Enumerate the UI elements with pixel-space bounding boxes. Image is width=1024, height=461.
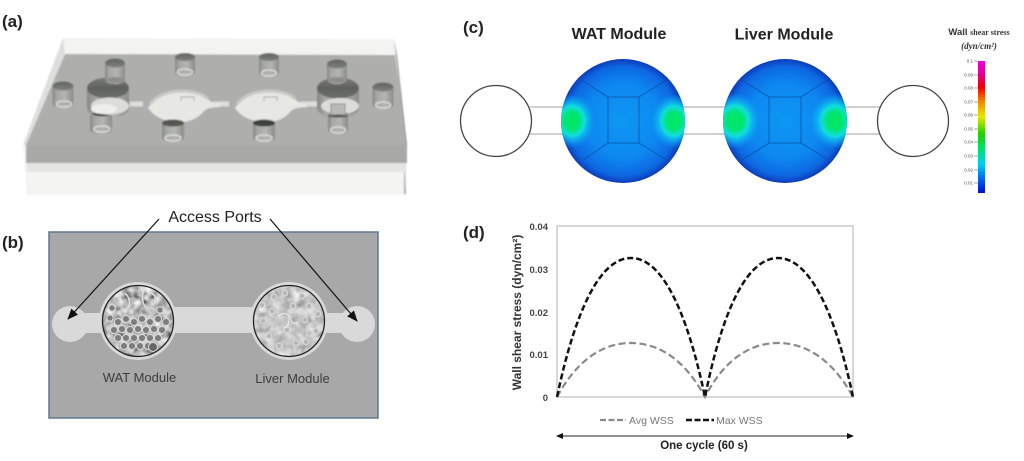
colour scale: wall shear stress: [948, 27, 1010, 193]
colour scale title: Wall shear stress: [948, 27, 1010, 38]
channels and leaf chambers: [130, 91, 318, 122]
panel c: shear stress simulation: [460, 59, 948, 183]
module label: Liver: Liver Module: [255, 371, 330, 386]
inlet port: [460, 86, 532, 156]
y axis labels: 0.01: [530, 350, 549, 361]
cycle arrow: [557, 435, 853, 437]
colour bar labels: 0.08: [964, 86, 973, 90]
legend: [600, 415, 763, 427]
colour bar labels: 0.03: [964, 154, 973, 158]
colour bar labels: 0.06: [964, 112, 973, 118]
y axis labels: 0.03: [530, 265, 548, 276]
y axis labels: [530, 222, 549, 404]
panel label a: (a): [2, 12, 23, 31]
Liver module heat map: [723, 59, 847, 183]
y axis labels: 0: [543, 393, 548, 404]
liver cell image: [253, 285, 325, 357]
legend: Max WSS: [716, 415, 763, 427]
legend: Avg WSS: [629, 415, 674, 427]
chip background: [49, 232, 378, 418]
series: Avg WSS: [557, 343, 853, 397]
y axis labels: 0.02: [530, 308, 548, 319]
colour bar labels: 0.07: [964, 100, 973, 104]
colour bar labels: 0.02: [964, 168, 973, 172]
callout: access ports: [68, 209, 357, 321]
heading: Liver Module: Liver Module: [735, 26, 833, 44]
y axis labels: 0.04: [530, 222, 549, 233]
colour bar labels: [964, 58, 973, 186]
panel label d: (d): [463, 223, 485, 242]
colour bar labels: 0.1: [967, 58, 973, 64]
colour bar labels: 0.09: [964, 72, 973, 78]
colour scale title: (dyn/cm²): [961, 41, 997, 51]
callout: access ports: Access Ports: [168, 209, 262, 226]
colour bar ticks: [974, 61, 978, 183]
module label: WAT: WAT Module: [103, 370, 176, 385]
line chart: wall shear stress over one cycle: [510, 222, 853, 452]
colour bar labels: 0.04: [964, 140, 973, 144]
plot frame: [557, 226, 853, 397]
colour bar labels: 0.05: [964, 126, 973, 132]
WAT module heat map: [561, 59, 685, 183]
outlet port: [878, 86, 948, 156]
colour bar labels: 0.01: [964, 180, 973, 186]
panel label b: (b): [2, 233, 24, 252]
small wells: [52, 53, 394, 142]
colour scale title: [948, 27, 1010, 51]
panel label c: (c): [463, 18, 484, 37]
panel a: 3D device: [23, 38, 407, 195]
channel and ports: [52, 282, 375, 360]
WAT cell image: [102, 285, 174, 357]
panel b: microscopy layout: [49, 232, 378, 418]
heading: WAT Module: WAT Module: [572, 26, 666, 43]
series: Max WSS: [557, 258, 853, 397]
colour bar: [978, 61, 985, 193]
large wells: [87, 78, 359, 118]
cycle label: One cycle (60 s): [660, 440, 748, 452]
y axis title: Wall shear stress (dyn/cm²): [510, 235, 524, 390]
